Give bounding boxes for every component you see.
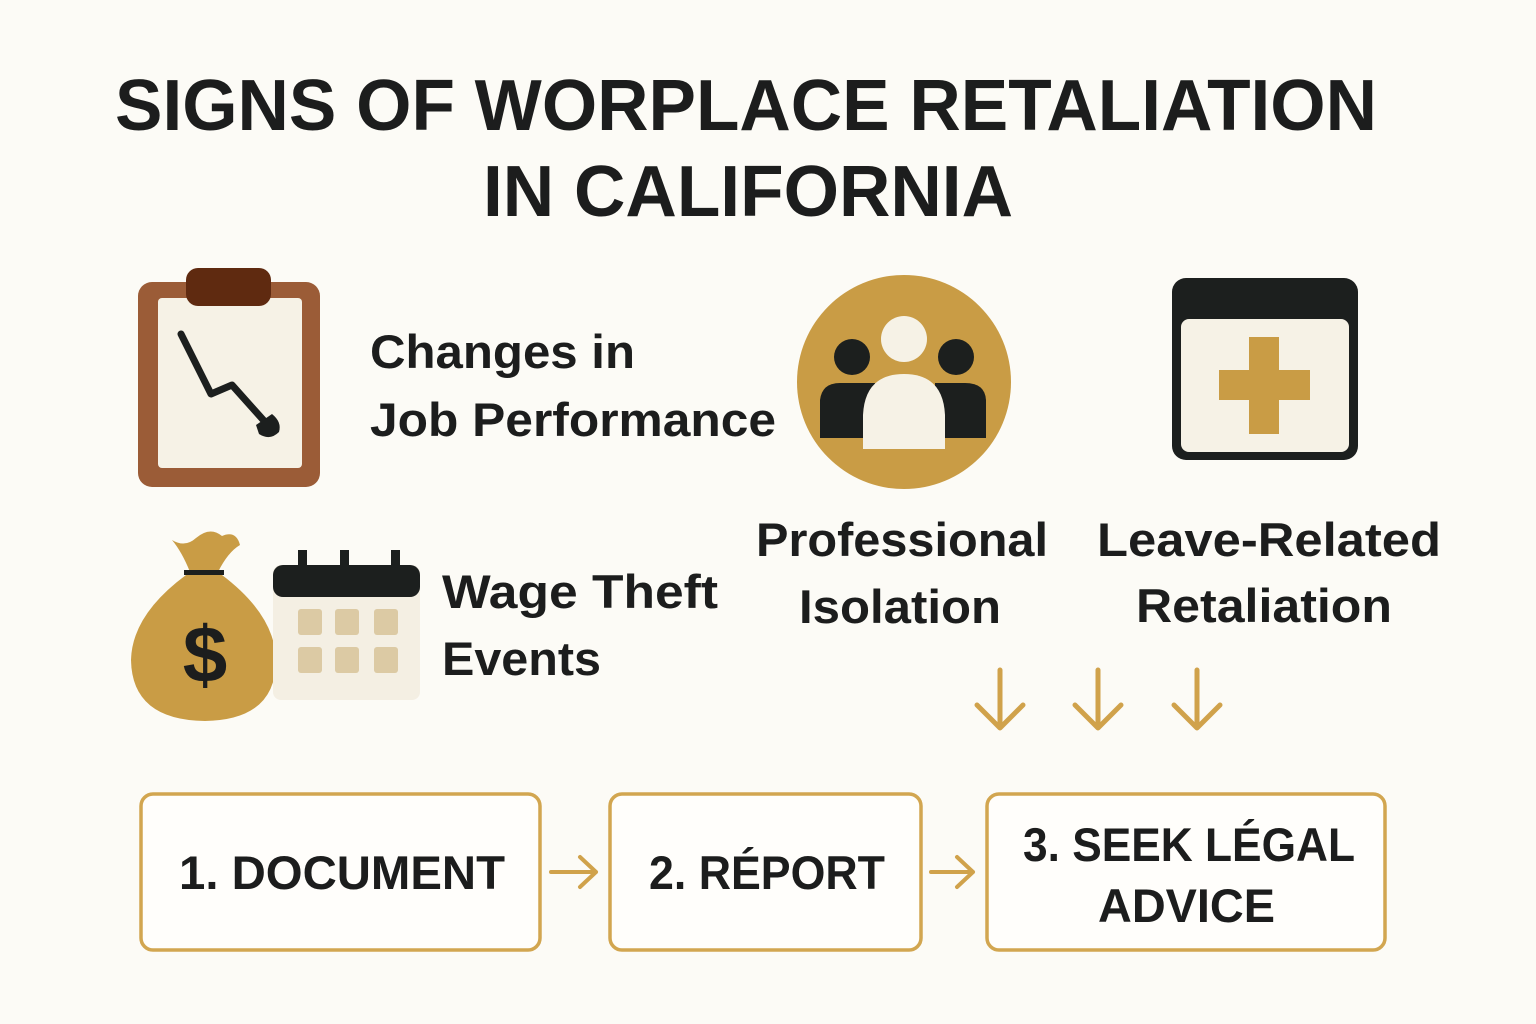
icon: group of people bbox=[797, 275, 1011, 489]
step box: report bbox=[610, 794, 921, 950]
text: professional isolation: Isolation bbox=[799, 580, 1001, 633]
arrow: right 2 bbox=[931, 857, 973, 887]
text: professional isolation bbox=[756, 513, 1048, 633]
text: changes in job performance: Changes in bbox=[370, 325, 635, 378]
step box: seek legal advice bbox=[987, 794, 1385, 950]
step box: document: 1. DOCUMENT bbox=[179, 846, 505, 899]
text: professional isolation: Professional bbox=[756, 513, 1048, 566]
text: leave-related retaliation: Leave-Related bbox=[1097, 513, 1441, 566]
title bbox=[115, 66, 1377, 232]
step box: document bbox=[141, 794, 540, 950]
step box: report: 2. RÉPORT bbox=[649, 846, 885, 899]
icon: money bag: $ bbox=[183, 610, 227, 699]
text: wage theft events bbox=[442, 565, 718, 685]
step box: seek legal advice: ADVICE bbox=[1098, 879, 1275, 932]
arrows: down bbox=[977, 670, 1220, 728]
icon: money bag bbox=[131, 531, 276, 721]
arrow: right 1 bbox=[551, 857, 596, 887]
icon: calendar bbox=[273, 550, 420, 700]
text: changes in job performance: Job Performance bbox=[370, 393, 776, 446]
text: wage theft events: Events bbox=[442, 632, 601, 685]
icon: medical leave calendar bbox=[1172, 278, 1358, 460]
text: leave-related retaliation bbox=[1097, 513, 1441, 632]
text: changes in job performance bbox=[370, 325, 776, 446]
text: leave-related retaliation: Retaliation bbox=[1136, 579, 1392, 632]
title: IN CALIFORNIA bbox=[483, 152, 1013, 232]
step box: seek legal advice: 3. SEEK LÉGAL bbox=[1023, 818, 1355, 871]
text: wage theft events: Wage Theft bbox=[442, 565, 718, 618]
icon: clipboard with declining chart bbox=[138, 268, 320, 487]
title: SIGNS OF WORPLACE RETALIATION bbox=[115, 66, 1377, 146]
